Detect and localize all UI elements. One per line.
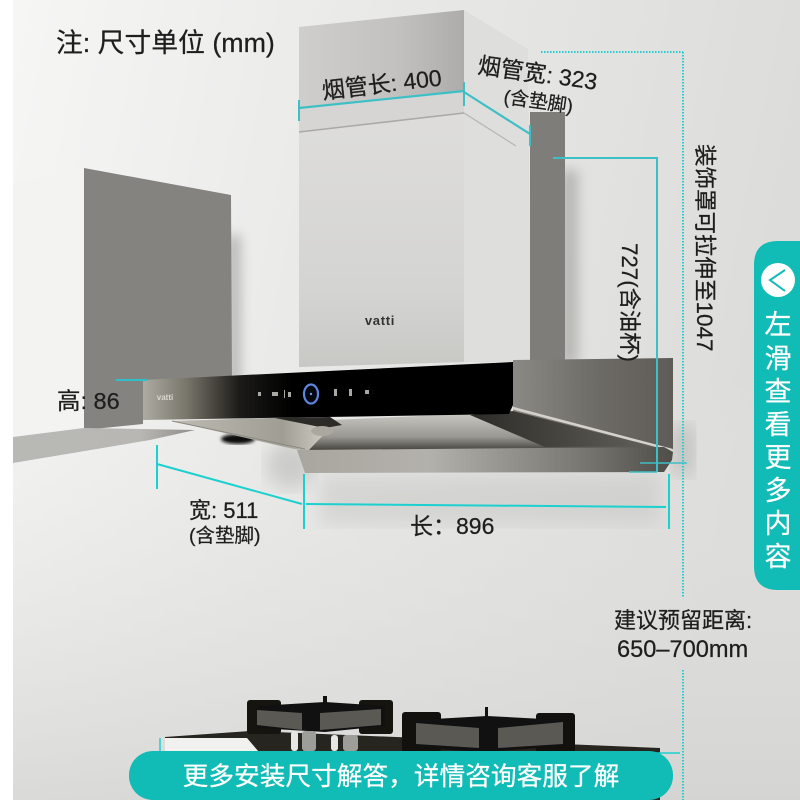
dimension: 727 height: 727(含油杯) [617,243,642,362]
touch keys [258,389,369,398]
clearance text: 建议预留距离: [614,608,752,633]
side tab: swipe for more: 内 [764,509,792,539]
range hood [143,358,673,473]
range hood: vatti [157,393,173,402]
right burner grate [402,707,575,753]
lower tray [297,447,673,473]
light ridge [513,408,672,450]
left glass wing [172,417,330,451]
dimension: hood height: 高: 86 [57,388,120,414]
side tab: swipe for more: 容 [764,542,792,572]
black control panel [143,362,513,420]
dimension: chimney width [464,52,599,146]
wall cabinet [13,168,232,463]
dimension: hood depth: 宽: 511 [189,498,258,523]
vent strip shadow [221,434,255,444]
short cooktop guide marks [160,738,680,753]
dimension: chimney width: (含垫脚) [502,86,574,118]
side tab: swipe for more: 滑 [764,344,792,374]
dimension: decorative cover extension: 装饰罩可拉伸至1047 [692,144,717,352]
dimension: hood length [306,474,669,539]
dimension: chimney width: 烟管宽: 323 [476,52,599,95]
back panel [513,358,673,449]
cooktop [165,696,660,800]
dimension: hood height [57,380,147,414]
left burner grate [247,696,393,751]
dimension: chimney length [299,65,464,121]
brand logo on chimney: vatti [365,313,395,328]
side tab: swipe for more: 多 [764,476,792,506]
clearance text: 650–700mm [617,637,748,663]
bottom banner: consult customer service: 更多安装尺寸解答，详情咨询客服了解 [183,762,619,791]
clearance text [614,608,752,663]
chimney cover [299,10,565,367]
note: units: 注: 尺寸单位 (mm) [56,28,275,58]
dimension: chimney length: 烟管长: 400 [321,65,443,104]
side tab: swipe for more: 更 [764,443,792,473]
power ring [304,384,318,404]
dimension: hood depth: (含垫脚) [189,525,260,547]
side tab: swipe for more [754,241,800,590]
side tab: swipe for more: 左 [764,310,792,340]
bottom banner: consult customer service [129,751,673,800]
dimension: hood depth [157,445,304,547]
dimension: 727 height [553,158,687,472]
dark underside [300,412,660,450]
side tab: swipe for more: 查 [764,377,792,407]
side tab: swipe for more: 看 [764,410,792,440]
icon: left arrow circle [761,263,795,297]
dimension: hood length: 长：896 [410,513,494,539]
